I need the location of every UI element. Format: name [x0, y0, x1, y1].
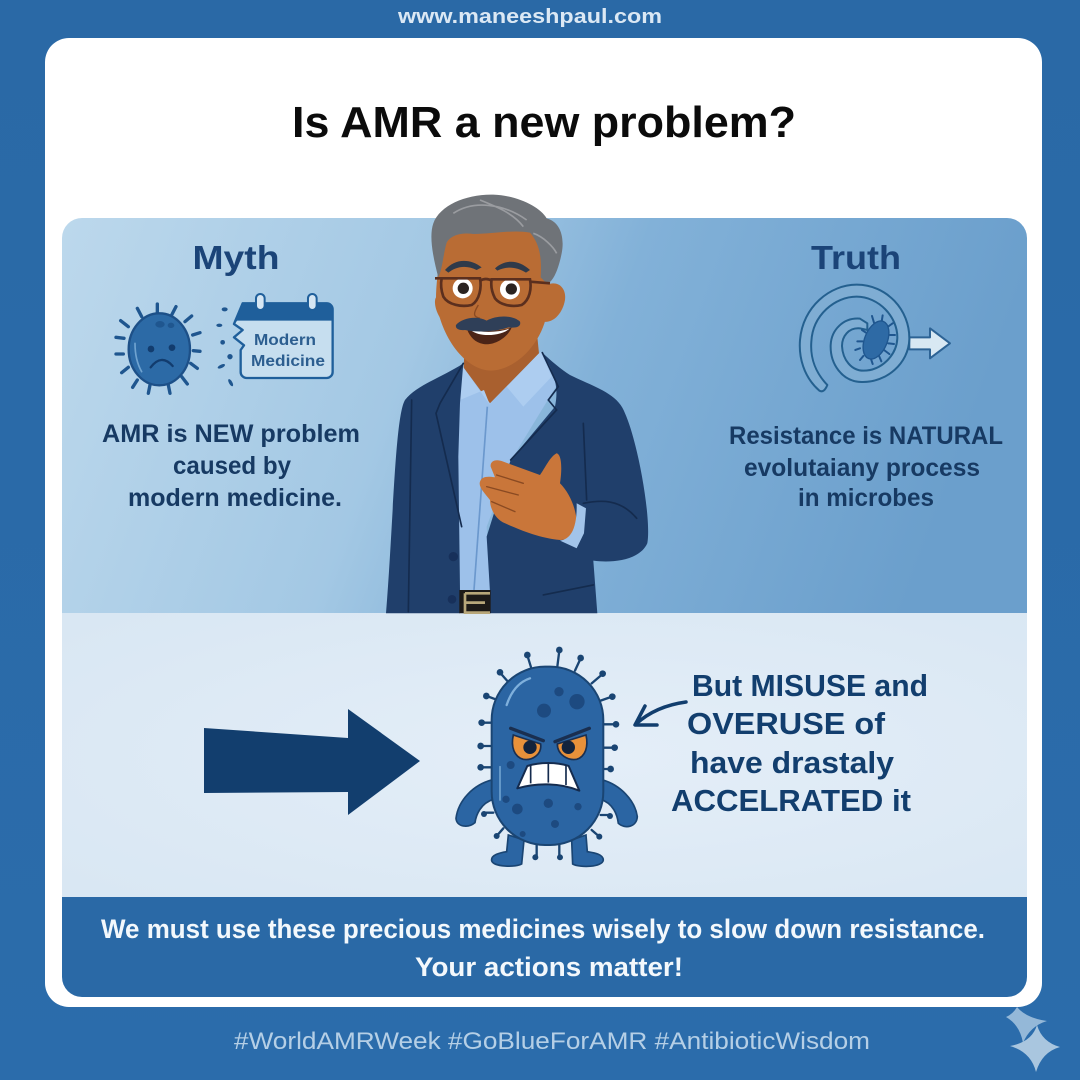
teeth: [517, 763, 579, 791]
cuff: [560, 503, 586, 548]
text: myth statement: caused by: [173, 452, 291, 480]
eyebrows: [445, 261, 482, 273]
text: myth statement: modern medicine.: [128, 484, 342, 512]
spots: [502, 687, 585, 837]
nose: [475, 305, 480, 318]
text: myth statement: [102, 420, 360, 512]
jacket: [386, 353, 648, 613]
text: banner message: [101, 914, 985, 982]
text: myth statement: AMR is NEW problem: [102, 420, 360, 448]
text: misuse statement: ACCELRATED it: [671, 783, 911, 818]
body: [492, 667, 603, 845]
icon: cracked calendar: [216, 294, 333, 387]
panel: lower accelerated section: [62, 613, 1027, 897]
text: misuse statement: OVERUSE of: [687, 706, 886, 741]
text: truth statement: evolutaiany process: [744, 454, 980, 482]
website url: www.maneeshpaul.com: [397, 6, 662, 28]
text: misuse statement: But MISUSE and: [692, 668, 928, 703]
banner: call to action: [62, 897, 1027, 997]
icon: sad microbe: [116, 304, 200, 393]
icon: sparkle watermark: [1006, 1007, 1060, 1072]
label: modern medicine: Modern: [254, 332, 316, 349]
arms: [456, 780, 493, 826]
text: banner message: We must use these precious medicines wisely to slow down resistance.: [101, 914, 985, 944]
shirt: [457, 352, 560, 592]
label: modern medicine: Medicine: [251, 353, 325, 370]
mouth: [467, 327, 512, 344]
text: banner message: Your actions matter!: [415, 952, 683, 982]
hair: [431, 195, 563, 284]
heading: truth: Truth: [811, 239, 901, 276]
panel: myth and truth: [62, 218, 1027, 613]
title: Is AMR a new problem?: [292, 98, 796, 147]
icon: spiral with microbe and arrow: [800, 285, 950, 391]
hand: [480, 453, 577, 540]
label: modern medicine: [251, 332, 325, 370]
arrow: large pointer: [204, 709, 420, 815]
illustration: angry microbe: [456, 647, 637, 866]
glasses: [435, 278, 550, 306]
hashtags: #WorldAMRWeek #GoBlueForAMR #AntibioticWisdom: [234, 1028, 870, 1055]
belt: [459, 590, 491, 613]
spikes: [477, 647, 619, 860]
neck: [463, 330, 540, 403]
ear: [543, 283, 565, 322]
illustration: presenter: [386, 195, 648, 613]
face: [436, 230, 549, 371]
text: truth statement: Resistance is NATURAL: [729, 422, 1003, 450]
text: truth statement: [729, 422, 1003, 512]
eyes: [453, 278, 473, 298]
text: misuse statement: [671, 668, 928, 818]
mustache: [456, 317, 520, 331]
text: misuse statement: have drastaly: [690, 745, 895, 780]
legs: [492, 835, 524, 866]
heading: myth: Myth: [192, 239, 280, 276]
eyes: [512, 735, 541, 760]
arrow: curved pointer to microbe: [635, 702, 686, 725]
text: truth statement: in microbes: [798, 484, 934, 512]
